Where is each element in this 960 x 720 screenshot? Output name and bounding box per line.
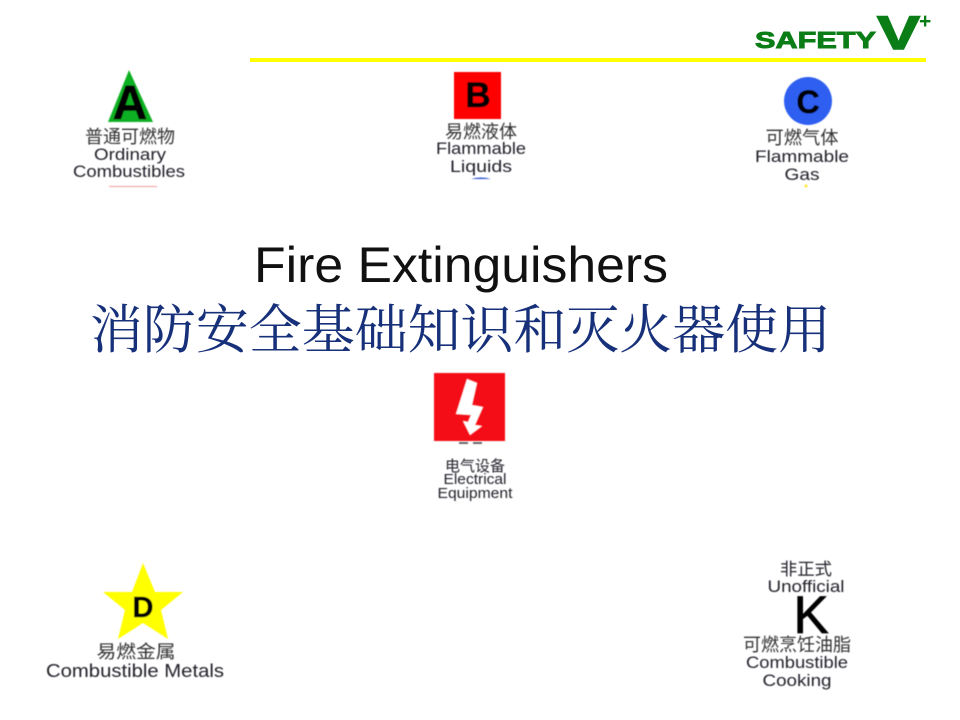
label: electrical: Electrical xyxy=(444,471,506,488)
label: electrical: Equipment xyxy=(438,485,513,502)
label: class A: Ordinary xyxy=(94,145,167,164)
header rule xyxy=(250,58,926,62)
label: class D: Combustible Metals xyxy=(46,661,224,681)
label: class A: 普通可燃物 xyxy=(85,127,175,147)
label: class B xyxy=(436,122,526,179)
label: unofficial xyxy=(768,560,844,596)
label: unofficial: 非正式 xyxy=(780,560,832,579)
logo: Safety V+: SAFETY xyxy=(755,27,876,53)
label: class C: Flammable xyxy=(755,147,849,166)
title: English: Fire Extinguishers xyxy=(254,237,668,293)
label: class D: 易燃金属 xyxy=(96,642,176,662)
label: class K: 可燃烹饪油脂 xyxy=(743,635,851,655)
logo: Safety V+: + xyxy=(919,10,931,33)
icon: yellow star D xyxy=(103,563,183,639)
logo: Safety V+: V xyxy=(877,6,921,59)
label: class C: Gas xyxy=(784,165,820,184)
label: electrical: 电气设备 xyxy=(445,458,505,475)
label: class D xyxy=(46,642,224,681)
title: Chinese: 消防安全基础知识和灭火器使用 xyxy=(90,302,831,360)
label: unofficial: Unofficial xyxy=(768,577,844,596)
icon: K: K xyxy=(793,586,829,645)
icon: green triangle A: A xyxy=(113,77,147,130)
label: class B: Flammable xyxy=(436,139,526,158)
label: class B: Liquids xyxy=(450,157,512,176)
logo: Safety V+ xyxy=(755,6,931,59)
icon: red square B: B xyxy=(465,76,491,115)
label: class K: Cooking xyxy=(762,671,832,690)
label: class K xyxy=(743,635,851,690)
class K: combustible cooking xyxy=(743,560,851,690)
label: electrical xyxy=(438,458,513,502)
class A: ordinary combustibles xyxy=(73,70,185,187)
label: class K: Combustible xyxy=(746,653,848,672)
class C: flammable gas xyxy=(755,77,849,188)
title xyxy=(90,237,831,360)
class B: flammable liquids xyxy=(436,72,526,179)
label: class C: 可燃气体 xyxy=(766,128,838,148)
icon: yellow star D: D xyxy=(133,592,153,624)
icon: red square lightning bolt xyxy=(434,373,505,444)
label: class C xyxy=(755,128,849,188)
label: class A: Combustibles xyxy=(73,162,185,181)
electrical equipment xyxy=(434,373,513,502)
label: class B: 易燃液体 xyxy=(445,122,517,142)
label: class A xyxy=(73,127,185,187)
icon: blue circle C: C xyxy=(796,84,820,120)
class D: combustible metals xyxy=(46,563,224,681)
